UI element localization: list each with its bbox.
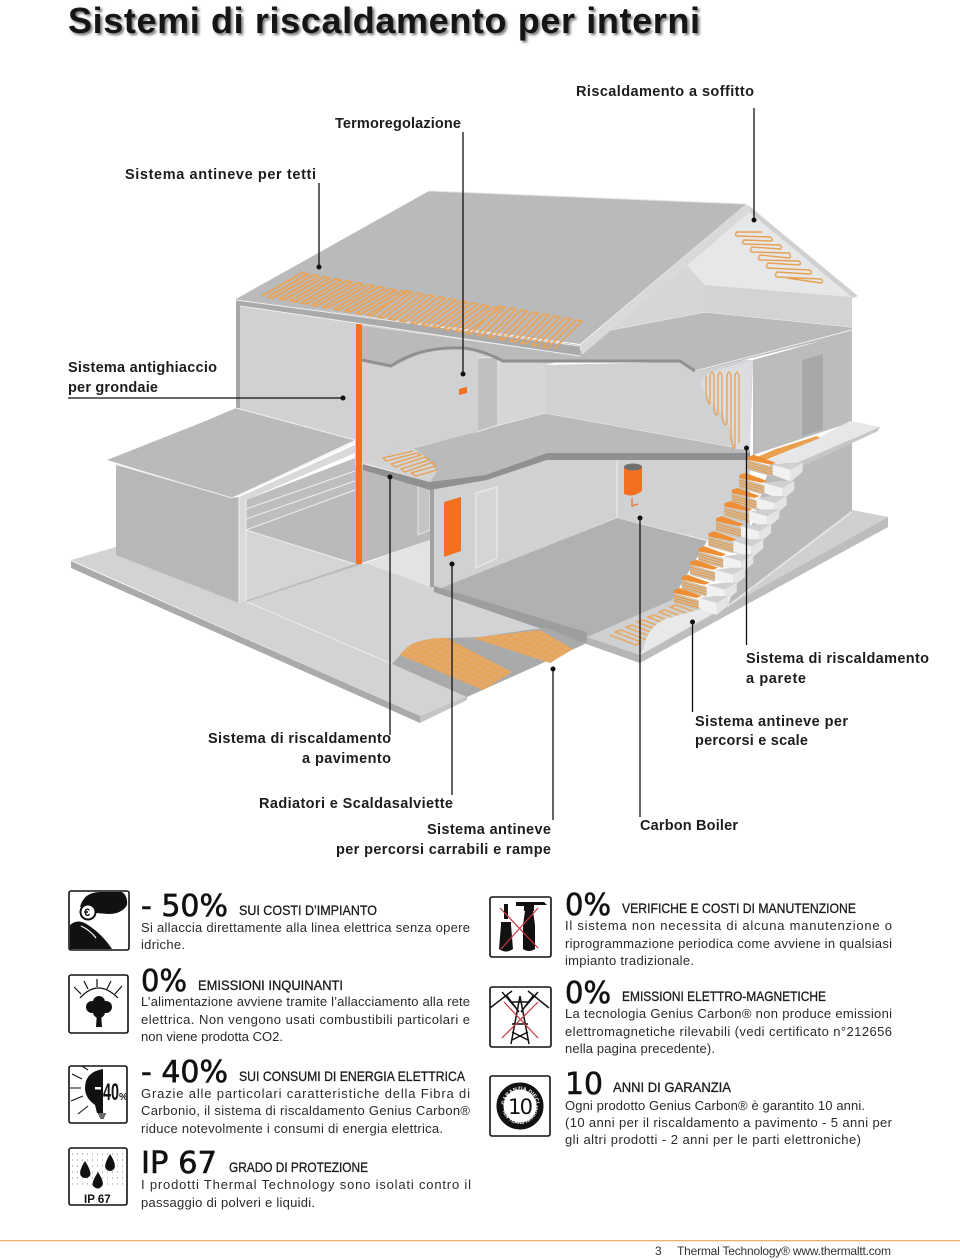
main roof bbox=[236, 191, 752, 356]
callout: Sistema antineve per tetti: Sistema antineve per tetti bbox=[125, 167, 316, 183]
callout: Riscaldamento a soffitto bbox=[576, 84, 756, 222]
callout: Sistema di riscaldamento a pavimento bbox=[208, 474, 392, 767]
block: 0% emissioni: elettrica. Non vengono usati combustibili particolari e bbox=[141, 1012, 470, 1027]
icon: tools crossed bbox=[490, 897, 551, 957]
ceiling with section bbox=[362, 312, 852, 372]
icon: ten-year warranty bbox=[489, 1075, 551, 1137]
ground slab right bbox=[586, 510, 888, 663]
block: 0% manutenzione: Il sistema non necessita di alcuna manutenzione o bbox=[565, 918, 892, 933]
carbon boiler bbox=[624, 464, 642, 506]
block: 10 anni: ANNI DI GARANZIA bbox=[613, 1079, 732, 1095]
icon: ten-year warranty: TEN YEARS WARRANTY bbox=[502, 1106, 538, 1124]
block: -50%: Si allaccia direttamente alla linea elettrica senza opere bbox=[141, 920, 470, 935]
icon: IP 67: IP 67 bbox=[84, 1194, 111, 1206]
block: 0% elettromagnetiche: La tecnologia Genius Carbon® non produce emissioni bbox=[565, 1006, 892, 1021]
lower room interior wall left bbox=[362, 465, 430, 563]
upper wall bbox=[238, 306, 580, 466]
callout: Sistema antineve per percorsi e scale bbox=[690, 620, 848, 749]
block: 0% emissioni: L’alimentazione avviene tramite l’allacciamento alla rete bbox=[141, 994, 470, 1009]
block: 0% elettromagnetiche: EMISSIONI ELETTRO-MAGNETICHE bbox=[622, 988, 826, 1004]
block: 10 anni: Ogni prodotto Genius Carbon® è garantito 10 anni. bbox=[565, 1098, 865, 1113]
central wall upper bbox=[362, 352, 753, 450]
footer bbox=[0, 1240, 960, 1258]
icon: light bulb -40% bbox=[69, 1066, 128, 1123]
driveway heating bbox=[392, 628, 585, 697]
callout: Sistema di riscaldamento a parete: a parete bbox=[746, 671, 806, 687]
block: IP 67: I prodotti Thermal Technology sono isolati contro il bbox=[141, 1177, 471, 1192]
callout: Sistema di riscaldamento a parete: Sistema di riscaldamento bbox=[746, 651, 929, 667]
title: Sistemi di riscaldamento per interni bbox=[70, 2, 702, 43]
callout: Sistema antighiaccio per grondaie: Sistema antighiaccio bbox=[68, 360, 217, 376]
icon: tree bbox=[69, 975, 128, 1033]
block: -40%: Carbonio, il sistema di riscaldamento Genius Carbon® bbox=[141, 1103, 470, 1118]
wall heating panel bbox=[700, 360, 752, 450]
dark panel bbox=[802, 354, 823, 436]
block: -40%: - 40% bbox=[141, 1055, 228, 1090]
thermostat bbox=[459, 387, 467, 395]
orange vertical pipe bbox=[356, 324, 362, 564]
gable serpentine bbox=[736, 232, 822, 283]
block: 0% manutenzione: 0% bbox=[565, 888, 611, 923]
block: IP 67: passaggio di polveri e liquidi. bbox=[141, 1195, 315, 1210]
title: Sistemi di riscaldamento per interni bbox=[68, 0, 700, 41]
block: 0% elettromagnetiche: 0% bbox=[565, 976, 611, 1011]
block: -50%: - 50% bbox=[141, 889, 228, 924]
callout: Sistema antineve per percorsi carrabili e rampe bbox=[336, 666, 556, 858]
room floor bbox=[436, 518, 707, 638]
right upper wall bbox=[753, 332, 852, 455]
block: IP 67: IP 67 bbox=[141, 1146, 217, 1181]
icon: IP 67 bbox=[69, 1148, 127, 1206]
icon: light bulb -40%: 40 bbox=[103, 1079, 119, 1106]
block: 10 anni: (10 anni per il riscaldamento a pavimento - 5 anni per bbox=[565, 1115, 893, 1130]
block: IP 67 bbox=[141, 1146, 471, 1210]
lower room walls bbox=[434, 460, 617, 590]
callout: Sistema di riscaldamento a pavimento: Sistema di riscaldamento bbox=[208, 731, 391, 747]
ground slab left bbox=[71, 547, 586, 723]
block: -40% bbox=[141, 1055, 470, 1136]
callout: Sistema antineve per percorsi carrabili e rampe: Sistema antineve bbox=[427, 822, 551, 838]
balcony bbox=[750, 421, 880, 472]
callout: Carbon Boiler: Carbon Boiler bbox=[640, 818, 738, 834]
block: 0% elettromagnetiche: nella pagina precedente). bbox=[565, 1041, 715, 1056]
gable bbox=[610, 205, 858, 330]
callout: Sistema di riscaldamento a parete bbox=[744, 446, 929, 687]
block: IP 67: GRADO DI PROTEZIONE bbox=[229, 1159, 368, 1175]
garage interior bbox=[239, 445, 362, 603]
callout: Radiatori e Scaldasalviette bbox=[259, 562, 454, 812]
footer: 3 bbox=[655, 1244, 662, 1258]
block: 10 anni: gli altri prodotti - 2 anni per le parti elettroniche) bbox=[565, 1132, 861, 1147]
callout: Sistema antineve per percorsi e scale: percorsi e scale bbox=[695, 733, 808, 749]
garage roof bbox=[107, 408, 355, 498]
block: 0% manutenzione: VERIFICHE E COSTI DI MANUTENZIONE bbox=[622, 900, 856, 916]
door lower bbox=[476, 487, 497, 568]
icon: euro cost bbox=[69, 891, 129, 950]
footer: Thermal Technology® www.thermaltt.com bbox=[677, 1244, 891, 1258]
block: -40%: Grazie alle particolari caratteristiche della Fibra di bbox=[141, 1086, 470, 1101]
garage wall bbox=[116, 465, 239, 603]
floor heating serpentine bbox=[383, 451, 437, 476]
callout: Sistema antighiaccio per grondaie: per grondaie bbox=[68, 380, 158, 396]
roof serpentine bbox=[262, 273, 582, 349]
stair wedge with serpentine bbox=[610, 605, 728, 655]
icon: ten-year warranty: GARANZIA DIECI ANNI bbox=[502, 1086, 540, 1104]
block: 0% emissioni: 0% bbox=[141, 964, 187, 999]
callout: Sistema antineve per percorsi carrabili e rampe: per percorsi carrabili e rampe bbox=[336, 842, 551, 858]
icon: electric tower crossed bbox=[490, 987, 551, 1047]
icon: light bulb -40%: % bbox=[119, 1092, 128, 1103]
callout: Termoregolazione: Termoregolazione bbox=[335, 116, 461, 132]
block: 0% emissioni bbox=[141, 964, 470, 1044]
mid floor slab bbox=[363, 413, 750, 490]
block: -40%: riduce notevolmente i consumi di energia elettrica. bbox=[141, 1121, 443, 1136]
block: 0% elettromagnetiche: elettromagnetiche rilevabili (vedi certificato n°212656 bbox=[565, 1024, 892, 1039]
callout: Radiatori e Scaldasalviette: Radiatori e Scaldasalviette bbox=[259, 796, 453, 812]
block: 10 anni bbox=[565, 1067, 893, 1147]
callout: Sistema di riscaldamento a pavimento: a pavimento bbox=[302, 751, 391, 767]
callout: Sistema antighiaccio per grondaie bbox=[68, 360, 346, 400]
icon: ten-year warranty: 10 bbox=[508, 1095, 533, 1119]
house illustration bbox=[71, 191, 888, 723]
radiator bbox=[444, 497, 461, 557]
block: -50%: SUI COSTI D’IMPIANTO bbox=[239, 902, 377, 918]
block: 0% emissioni: EMISSIONI INQUINANTI bbox=[198, 977, 343, 993]
callout: Sistema antineve per percorsi e scale: Sistema antineve per bbox=[695, 714, 848, 730]
block: 0% manutenzione: impianto tradizionale. bbox=[565, 953, 694, 968]
block: 0% manutenzione: riprogrammazione periodica come avviene in qualsiasi bbox=[565, 936, 892, 951]
block: 10 anni: 10 bbox=[565, 1067, 603, 1102]
block: 0% elettromagnetiche bbox=[565, 976, 892, 1056]
callout: Carbon Boiler bbox=[638, 516, 738, 834]
block: 0% manutenzione bbox=[565, 888, 892, 968]
lower right wall bbox=[728, 430, 852, 605]
icon: euro cost: € bbox=[84, 907, 90, 919]
stairs bbox=[674, 455, 803, 615]
block: -40%: SUI CONSUMI DI ENERGIA ELETTRICA bbox=[239, 1068, 466, 1084]
callout: Sistema antineve per tetti bbox=[125, 167, 322, 270]
block: -50% bbox=[141, 889, 470, 952]
callout: Termoregolazione bbox=[335, 116, 466, 376]
callout: Riscaldamento a soffitto: Riscaldamento a soffitto bbox=[576, 84, 754, 100]
block: -50%: idriche. bbox=[141, 937, 185, 952]
block: 0% emissioni: non viene prodotta CO2. bbox=[141, 1029, 283, 1044]
